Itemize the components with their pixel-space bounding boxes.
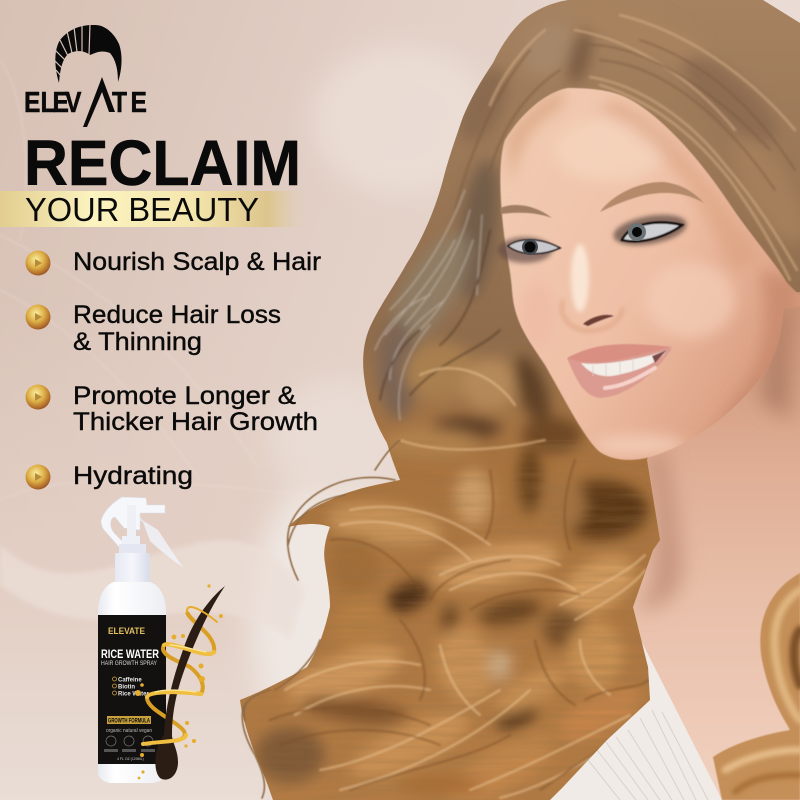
- bottle label: RICE WATER: [101, 649, 160, 661]
- benefits list: [26, 248, 321, 490]
- hair strands: [270, 15, 797, 798]
- upper hair tones: [374, 0, 800, 460]
- bottle label: Rice Water: [118, 692, 149, 698]
- benefit 3: Thicker Hair Growth: [73, 408, 318, 436]
- left eye: [498, 237, 560, 263]
- bottle label: ELEVATE: [108, 626, 145, 637]
- bottle label: [98, 615, 166, 764]
- sweater: [550, 642, 722, 800]
- neck and chest: [633, 292, 800, 800]
- logo: elevate: [24, 24, 147, 127]
- bottle label: Biotin: [118, 684, 135, 690]
- illustration: hair strand with gold spiral: [135, 584, 225, 780]
- icon: hair quiff: [54, 24, 122, 83]
- benefit 2: Reduce Hair Loss: [73, 301, 281, 329]
- hair warm tint: [240, 437, 660, 800]
- woman photo illustration: [230, 0, 800, 800]
- logo wordmark: ELEVA TE: [24, 86, 147, 118]
- neck shading: [635, 300, 790, 610]
- benefit 3: [26, 382, 318, 436]
- eyebrows: [500, 182, 704, 218]
- bottle label: GROWTH FORMULA: [108, 718, 150, 724]
- benefit 1: Nourish Scalp & Hair: [73, 248, 321, 276]
- flyaway hair wisps: [242, 440, 400, 798]
- gold spiral front: [143, 607, 217, 744]
- right eye: [611, 210, 689, 250]
- hair texture: [306, 440, 644, 779]
- bottle label: organic natural vegan: [106, 728, 152, 734]
- bottle label: HAIR GROWTH SPRAY: [101, 660, 158, 667]
- right lower curl: [713, 573, 800, 800]
- hair strand shaft: [155, 586, 225, 780]
- bottle label: Caffeine: [118, 678, 142, 684]
- bottle body: [98, 582, 166, 783]
- face shading: [505, 88, 800, 455]
- benefit 4: [26, 462, 193, 490]
- benefit 3: Promote Longer &: [73, 382, 296, 410]
- hair mass: [230, 0, 800, 800]
- gold spiral back: [147, 612, 214, 741]
- bottle label: 4 FL OZ (120ML): [117, 757, 144, 761]
- lower hair tones: [255, 446, 648, 800]
- product bottle: [98, 497, 225, 783]
- nose: [562, 244, 623, 331]
- logo peak mark: [83, 77, 115, 127]
- title: RECLAIM: [24, 127, 301, 199]
- benefit 2: [26, 301, 281, 356]
- hair base colour: [230, 0, 800, 800]
- spray trigger head: [101, 497, 184, 583]
- gold droplets: [135, 584, 223, 779]
- benefit 4: Hydrating: [73, 462, 193, 490]
- subtitle band: YOUR BEAUTY: [25, 191, 259, 228]
- benefit 2: & Thinning: [73, 328, 202, 356]
- smile: [567, 344, 672, 398]
- face: [500, 88, 800, 460]
